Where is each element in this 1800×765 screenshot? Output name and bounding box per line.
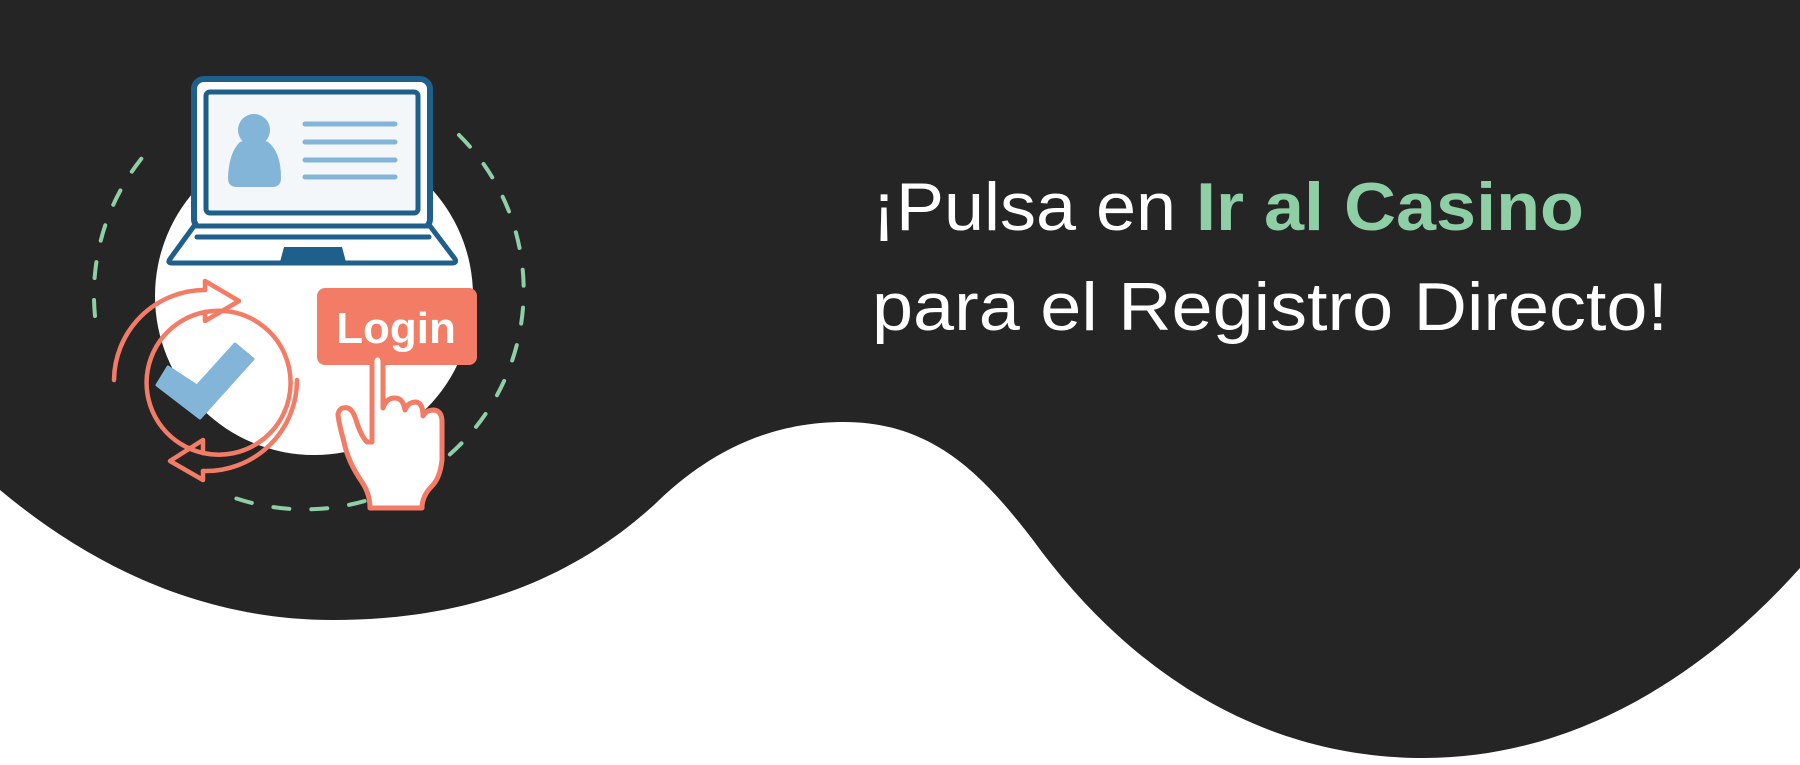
icon: checkmark [157, 344, 253, 418]
icon: refresh arrows [114, 281, 297, 480]
headline [872, 169, 1668, 345]
icon: laptop [169, 79, 456, 263]
headline: para el Registro Directo! [872, 269, 1668, 345]
profile lines [305, 124, 395, 177]
login button: Login [336, 304, 456, 353]
icon: pointing hand [338, 355, 442, 508]
white circle backdrop [155, 137, 473, 455]
dashed green ring [94, 135, 524, 509]
login button [317, 288, 477, 365]
icon: user avatar [228, 114, 281, 187]
headline: ¡Pulsa en Ir al Casino [872, 169, 1584, 245]
illustration: login [94, 79, 524, 509]
